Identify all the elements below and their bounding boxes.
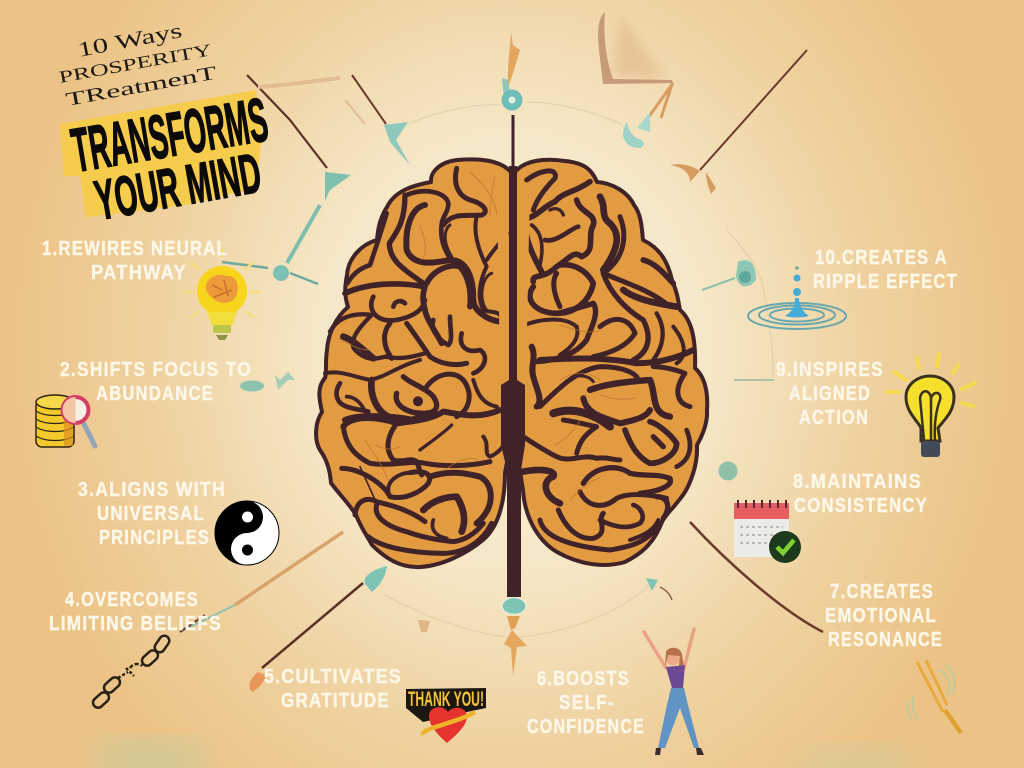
item 2 icon: coins and magnifier <box>36 395 95 447</box>
item 1 text <box>42 238 228 284</box>
central fissure <box>501 166 525 597</box>
yellow highlight <box>60 90 262 217</box>
item 7 text: RESONANCE <box>828 629 943 651</box>
item 3 icon: yin yang <box>215 501 279 565</box>
item 9 text <box>776 359 884 429</box>
title block <box>57 18 273 232</box>
item 8 text <box>793 471 928 517</box>
item 2 text <box>60 359 252 405</box>
left hemisphere outline <box>316 159 511 567</box>
item 4 text: LIMITING BELIEFS <box>49 613 222 635</box>
sulci upper <box>325 168 693 427</box>
item 5 icon: thank you heart: THANK YOU! <box>408 688 484 711</box>
item 4 text: 4.OVERCOMES <box>65 589 199 611</box>
item 9 icon: yellow light bulb <box>887 354 975 457</box>
item 1 text: 1.REWIRES NEURAL <box>42 238 228 260</box>
item 7 icon: tuning fork <box>907 660 961 733</box>
gyri texture <box>338 172 635 500</box>
title: 10 ways prosperity treatment: TReatmenT <box>64 63 219 111</box>
orange strips beside the fissure <box>497 185 530 378</box>
item 9 text: ACTION <box>799 407 869 429</box>
decorative neural connectors <box>90 12 915 768</box>
title: 10 ways prosperity treatment: PROSPERITY <box>57 40 213 87</box>
item 9 text: 9.INSPIRES <box>776 359 884 381</box>
item 3 text: PRINCIPLES <box>99 527 210 549</box>
item 7 text: 7.CREATES <box>830 581 934 603</box>
item 10 text: RIPPLE EFFECT <box>813 271 958 293</box>
item 3 text: 3.ALIGNS WITH <box>78 479 226 501</box>
item 3 text <box>78 479 226 549</box>
item 5 text: 5.CULTIVATES <box>264 666 402 688</box>
item 5 icon: thank you heart <box>406 688 486 743</box>
item 8 icon: calendar with check <box>734 500 801 563</box>
item 6 text: CONFIDENCE <box>527 716 645 738</box>
item 5 text <box>264 666 402 712</box>
brain illustration <box>316 159 707 597</box>
item 5 text: GRATITUDE <box>281 690 390 712</box>
right hemisphere outline <box>515 160 707 565</box>
item 4 text <box>49 589 222 635</box>
item 2 text: ABUNDANCE <box>96 383 214 405</box>
item 6 text: SELF- <box>559 692 615 714</box>
item 3 text: UNIVERSAL <box>97 503 205 525</box>
item 10 text: 10.CREATES A <box>815 247 948 269</box>
item 7 text <box>825 581 943 651</box>
heading: transforms your mind: YOUR MIND <box>90 141 266 232</box>
title: 10 ways prosperity treatment <box>57 18 219 111</box>
item 6 text <box>527 668 645 738</box>
item 10 text <box>813 247 958 293</box>
text: TRANSFORMS <box>67 86 273 186</box>
sulci lower <box>342 410 690 553</box>
item 6 text: 6.BOOSTS <box>537 668 630 690</box>
item 2 text: 2.SHIFTS FOCUS TO <box>60 359 252 381</box>
item 9 text: ALIGNED <box>789 383 871 405</box>
item 7 text: EMOTIONAL <box>825 605 937 627</box>
item 4 icon: broken chain <box>91 634 171 710</box>
title: 10 ways prosperity treatment: 10 Ways <box>75 18 184 62</box>
item 6 icon: woman with raised arms <box>644 629 704 755</box>
item 1 icon: brain light bulb <box>183 248 261 340</box>
item 10 icon: water ripple <box>748 266 846 329</box>
item 1 text: PATHWAY <box>91 262 187 284</box>
item 8 text: 8.MAINTAINS <box>793 471 922 493</box>
item 8 text: CONSISTENCY <box>794 495 928 517</box>
heading: transforms your mind <box>67 86 273 232</box>
